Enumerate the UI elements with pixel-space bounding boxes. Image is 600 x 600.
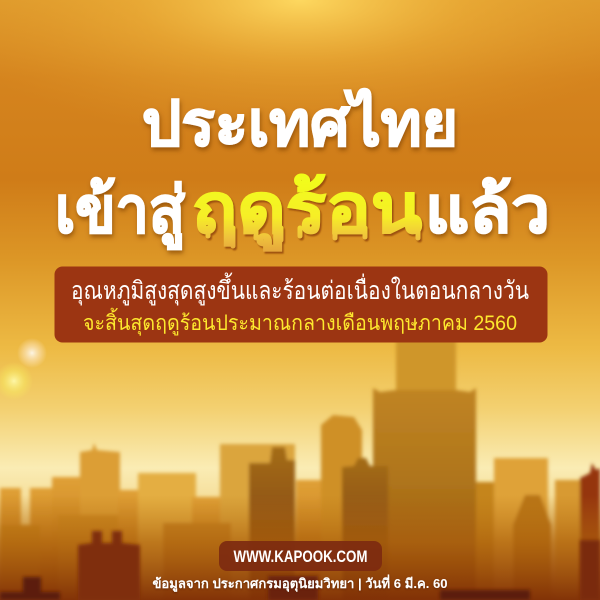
website badge: WWW.KAPOOK.COM	[234, 547, 368, 566]
city skyline	[0, 330, 600, 600]
info line 2: จะสิ้นสุดฤดูร้อนประมาณกลางเดือนพฤษภาคม 2560	[83, 308, 517, 336]
main tower	[373, 330, 476, 600]
lens flares	[0, 338, 47, 400]
highlighted melting word: ฤดูร้อน	[192, 171, 422, 252]
title line 1: ประเทศไทย	[142, 88, 458, 159]
back buildings	[0, 415, 581, 600]
title line 2: เข้าสู่	[55, 174, 185, 250]
website badge	[219, 541, 382, 571]
info panel	[54, 266, 548, 342]
source credit: ข้อมูลจาก ประกาศกรมอุตุนิยมวิทยา | วันที่ 6 มี.ค. 60	[152, 574, 448, 592]
front buildings	[0, 447, 600, 600]
foreground buildings	[0, 531, 600, 600]
title line 2	[55, 174, 550, 250]
ground haze	[0, 495, 600, 600]
title line 2: แล้ว	[425, 174, 550, 246]
drips	[208, 228, 418, 246]
